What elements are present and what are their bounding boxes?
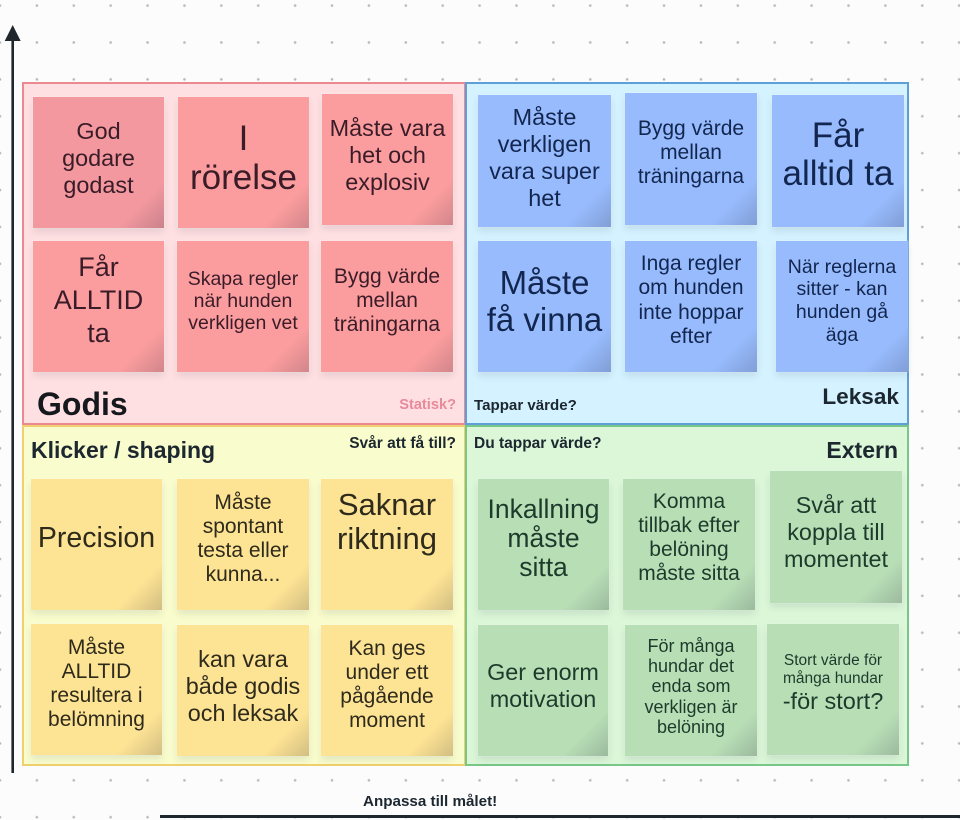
- panel: Klicker / shaping: [22, 425, 466, 766]
- sticky: Får ALLTID ta: [33, 241, 164, 372]
- sticky: Kan ges under ett pågående moment: under ett: [346, 661, 428, 684]
- sticky: God godare godast: godare: [62, 144, 135, 170]
- sticky: Måste få vinna: få vinna: [487, 300, 602, 337]
- sticky: Ger enorm motivation: [478, 625, 608, 756]
- sticky: Komma tillbak efter belöning måste sitta: måste sitta: [638, 562, 740, 585]
- label: Du tappar värde?: Du tappar värde?: [474, 435, 601, 452]
- sticky: Måste ALLTID resultera i belömning: belömning: [48, 708, 145, 731]
- sticky: I rörelse: I: [239, 118, 248, 157]
- sticky: Precision: [31, 479, 162, 610]
- sticky: Bygg värde mellan träningarna: [321, 241, 453, 372]
- sticky: För många hundar det enda som verkligen är belöning: För många: [647, 636, 735, 656]
- sticky: Skapa regler när hunden verkligen vet: verkligen vet: [188, 312, 298, 334]
- sticky: Komma tillbak efter belöning måste sitta: Komma: [653, 490, 725, 513]
- sticky: kan vara både godis och leksak: både godis: [186, 672, 300, 698]
- sticky: Stort värde för många hundar - för stort?: [767, 624, 899, 755]
- axis label: Anpassa till målet!: Anpassa till målet!: [363, 793, 497, 810]
- sticky: Skapa regler när hunden verkligen vet: Skapa regler: [188, 268, 298, 290]
- sticky: Saknar riktning: [321, 479, 453, 610]
- horizontal axis line: [160, 815, 960, 818]
- sticky: Bygg värde mellan träningarna (leksak): träningarna: [638, 165, 744, 188]
- sticky: Måste spontant testa eller kunna: Måste: [214, 491, 272, 514]
- sticky: God godare godast: [33, 97, 164, 228]
- sticky: När reglerna sitter - kan hunden gå äga: hunden gå: [796, 301, 888, 323]
- sticky: När reglerna sitter - kan hunden gå äga: När reglerna: [788, 255, 896, 277]
- sticky: Precision: Precision: [38, 522, 155, 554]
- sticky: Måste spontant testa eller kunna: spontant: [203, 515, 283, 538]
- sticky: God godare godast: God: [76, 117, 121, 143]
- sticky: Bygg värde mellan träningarna: mellan: [356, 289, 418, 312]
- label: Statisk?: Statisk?: [399, 397, 456, 413]
- sticky: Kan ges under ett pågående moment: [321, 625, 453, 756]
- sticky: Måste spontant testa eller kunna: kunna...: [206, 563, 280, 586]
- sticky: Komma tillbak efter belöning måste sitta: belöning: [649, 538, 729, 561]
- heading: Godis: Godis: [37, 386, 128, 422]
- sticky: Komma tillbak efter belöning måste sitta: tillbak efter: [638, 514, 740, 537]
- sticky: Stort värde för många hundar - för stort?: Stort värde för: [784, 652, 882, 669]
- sticky: När reglerna sitter - kan hunden gå äga: [776, 241, 908, 372]
- sticky: Måste vara het och explosiv: het och: [349, 141, 426, 167]
- vertical axis arrow: [4, 25, 21, 773]
- sticky: Måste ALLTID resultera i belömning: Måste: [68, 636, 125, 659]
- sticky: Kan ges under ett pågående moment: moment: [349, 709, 425, 732]
- sticky: Kan ges under ett pågående moment: Kan ges: [348, 637, 426, 660]
- sticky: Bygg värde mellan träningarna (leksak): [625, 93, 757, 225]
- sticky: Måste verkligen vara super het: [478, 95, 611, 227]
- sticky: Svår att koppla till momentet: [770, 471, 902, 603]
- sticky: Ger enorm motivation: motivation: [490, 685, 596, 711]
- sticky: Måste vara het och explosiv: explosiv: [345, 168, 430, 194]
- sticky: Bygg värde mellan träningarna: Bygg värde: [334, 265, 440, 288]
- sticky: Får alltid ta: [772, 95, 904, 227]
- heading: Leksak: Leksak: [822, 384, 899, 409]
- sticky: Får alltid ta: alltid ta: [783, 154, 893, 193]
- sticky: Kan ges under ett pågående moment: pågående: [340, 685, 434, 708]
- sticky: Bygg värde mellan träningarna (leksak): Bygg värde: [638, 117, 744, 140]
- label: Svår att få till?: Svår att få till?: [349, 435, 456, 452]
- sticky: För många hundar det enda som verkligen är belöning: verkligen är: [644, 697, 738, 717]
- sticky: I rörelse: [178, 97, 309, 228]
- sticky: kan vara både godis och leksak: kan vara: [198, 645, 288, 671]
- sticky: Måste ALLTID resultera i belömning: ALLTID: [62, 660, 131, 683]
- sticky: Måste få vinna: [478, 241, 611, 372]
- sticky: Skapa regler när hunden verkligen vet: [177, 241, 309, 372]
- sticky: När reglerna sitter - kan hunden gå äga: äga: [826, 324, 858, 346]
- sticky: Inga regler om hunden inte hoppar efter: efter: [670, 325, 712, 348]
- sticky: Får ALLTID ta: ALLTID: [54, 284, 143, 314]
- sticky: Måste verkligen vara super het: verkligen: [498, 130, 591, 156]
- sticky: kan vara både godis och leksak: och leksak: [188, 699, 298, 725]
- label: Tappar värde?: Tappar värde?: [474, 397, 577, 414]
- sticky: Får alltid ta: Får: [812, 116, 864, 155]
- sticky: Stort värde för många hundar - för stort?: -för stort?: [783, 688, 883, 714]
- sticky: Inkallning måste sitta: [478, 479, 609, 610]
- sticky: Ger enorm motivation: Ger enorm: [487, 658, 599, 684]
- sticky: Komma tillbak efter belöning måste sitta: [623, 479, 755, 610]
- sticky: Måste verkligen vara super het: vara super: [489, 157, 600, 183]
- sticky: Svår att koppla till momentet: momentet: [784, 545, 888, 571]
- sticky: I rörelse: rörelse: [190, 157, 297, 196]
- sticky: Måste verkligen vara super het: Måste: [513, 103, 576, 129]
- sticky: För många hundar det enda som verkligen är belöning: belöning: [657, 717, 725, 737]
- sticky: Måste vara het och explosiv: Måste vara: [330, 114, 445, 140]
- sticky: Bygg värde mellan träningarna (leksak): mellan: [660, 141, 722, 164]
- sticky: För många hundar det enda som verkligen är belöning: [625, 625, 757, 756]
- sticky: För många hundar det enda som verkligen är belöning: hundar det: [648, 656, 734, 676]
- sticky: Måste verkligen vara super het: het: [528, 184, 561, 210]
- sticky: Inkallning måste sitta: Inkallning: [488, 493, 599, 523]
- sticky: Måste vara het och explosiv: [322, 94, 453, 225]
- heading: Extern: Extern: [826, 437, 898, 463]
- sticky: Stort värde för många hundar - för stort?: många hundar: [783, 670, 883, 687]
- sticky: Måste få vinna: Måste: [500, 263, 589, 300]
- sticky: Saknar riktning: riktning: [337, 521, 437, 556]
- sticky: God godare godast: godast: [63, 171, 134, 197]
- panel: Leksak: [465, 82, 909, 425]
- sticky: Inga regler om hunden inte hoppar efter: Inga regler: [641, 252, 741, 275]
- sticky: Måste ALLTID resultera i belömning: resultera i: [50, 684, 143, 707]
- sticky: Får ALLTID ta: Får: [78, 251, 119, 281]
- sticky: För många hundar det enda som verkligen är belöning: enda som: [651, 676, 731, 696]
- heading: Klicker / shaping: Klicker / shaping: [31, 437, 215, 463]
- sticky: Svår att koppla till momentet: koppla till: [787, 518, 885, 544]
- sticky: Får ALLTID ta: ta: [87, 317, 110, 347]
- sticky: Måste spontant testa eller kunna: testa eller: [197, 539, 289, 562]
- sticky: Inkallning måste sitta: måste: [507, 522, 580, 552]
- sticky: Inga regler om hunden inte hoppar efter: inte hoppar: [638, 300, 744, 323]
- sticky: kan vara både godis och leksak: [177, 625, 309, 756]
- sticky: Bygg värde mellan träningarna: träningarna: [334, 313, 440, 336]
- sticky: När reglerna sitter - kan hunden gå äga: sitter - kan: [796, 278, 888, 300]
- sticky: Inga regler om hunden inte hoppar efter: [625, 241, 757, 372]
- sticky: Saknar riktning: Saknar: [338, 487, 436, 522]
- sticky: Måste spontant testa eller kunna: [177, 479, 309, 610]
- sticky: Inga regler om hunden inte hoppar efter: om hunden: [638, 276, 744, 299]
- sticky: Skapa regler när hunden verkligen vet: när hunden: [194, 290, 292, 312]
- sticky: Inkallning måste sitta: sitta: [519, 551, 568, 581]
- panel: Godis: [22, 82, 466, 425]
- sticky: Svår att koppla till momentet: Svår att: [796, 491, 876, 517]
- panel: Extern: [465, 425, 909, 766]
- sticky: Måste ALLTID resultera i belömning: [31, 624, 162, 755]
